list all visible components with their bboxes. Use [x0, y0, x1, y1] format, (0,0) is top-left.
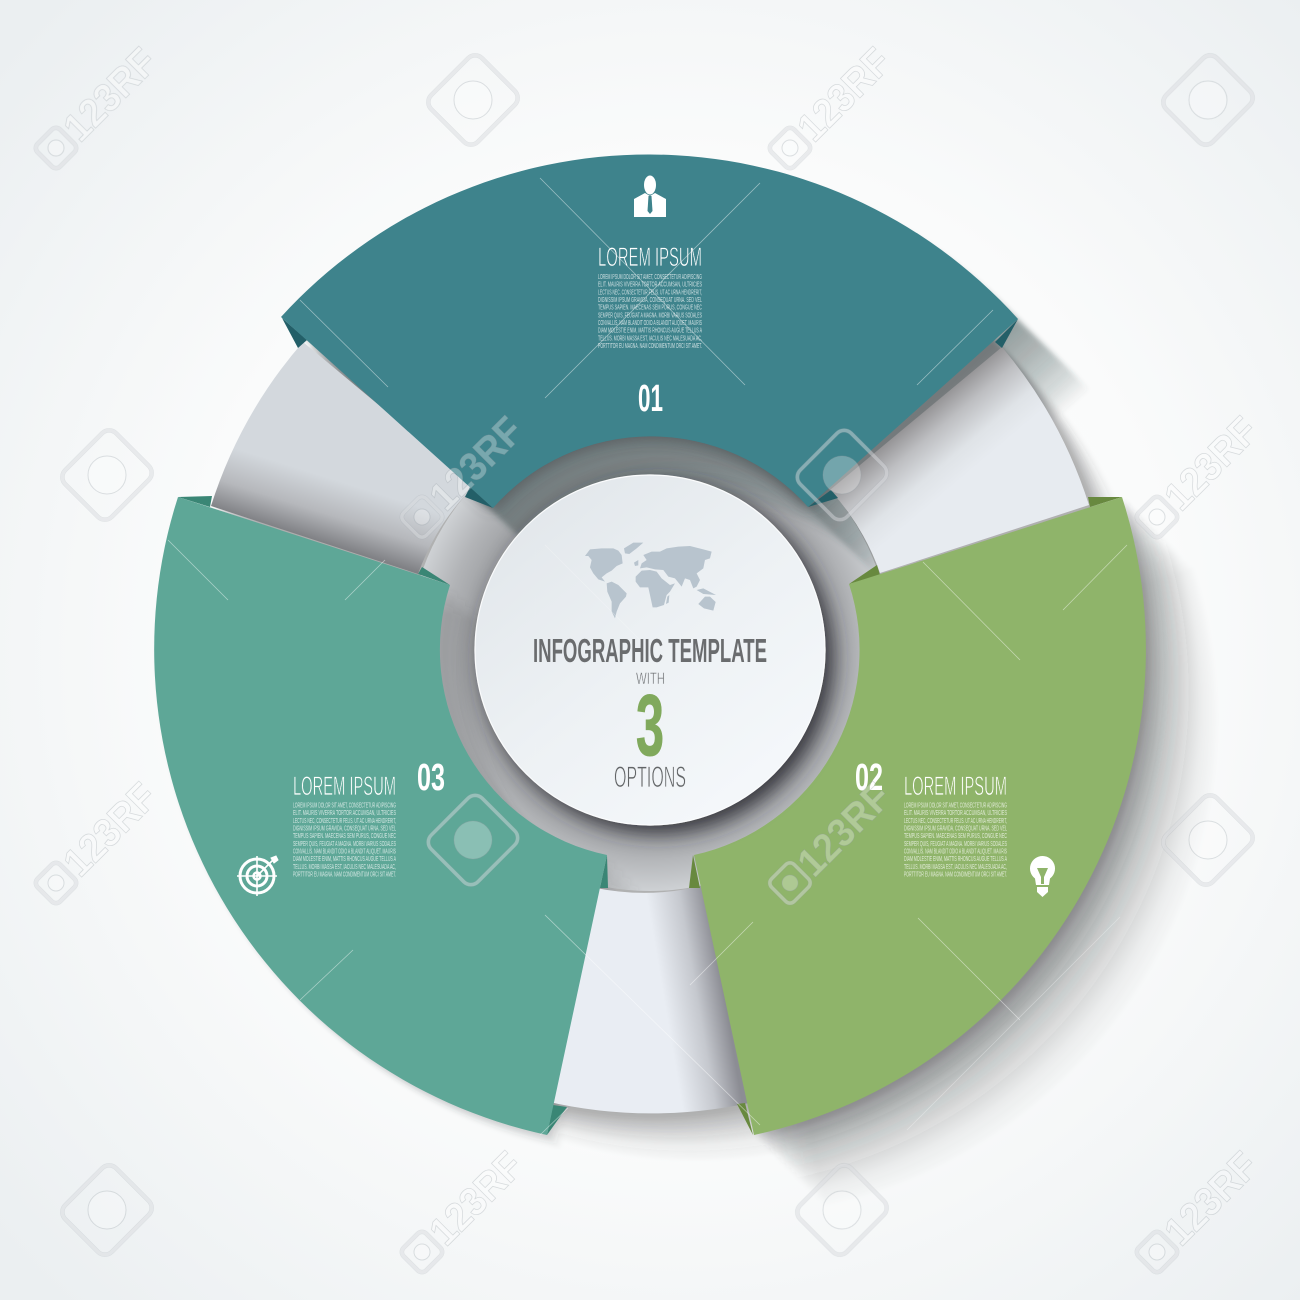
text: CONVALLIS. NAM BLANDIT ODIO A BLANDIT ALIQUET. MAURIS — [598, 320, 702, 327]
segment 01 body text: TELLUS. MORBI MASSA EST, IACULIS NEC MALESUADA AC, — [598, 335, 702, 342]
watermark: 123RF logos: 123RF — [55, 775, 166, 885]
watermark: diagonal cross lines — [168, 178, 1127, 1135]
segment 01 body text: ELIT. MAURIS VIVERRA TORTOR ACCUMSAN, ULTRICIES — [598, 282, 702, 289]
segment 01 number: 01 — [638, 378, 663, 420]
folds: teal segment — [282, 318, 1018, 508]
segment 02 body text: DIAM MOLESTIE ENIM, MATTIS RHONCUS AUGUE TELLUS A — [904, 856, 1007, 863]
icon: world map — [585, 543, 716, 618]
segment 03 body text: DIGNISSIM IPSUM GRAVIDA, CONSEQUAT URNA. SED VEL — [293, 826, 396, 832]
icon: person — [634, 176, 666, 217]
watermark: faint line on shadow — [907, 917, 1120, 1130]
segment 03 body text: ELIT. MAURIS VIVERRA TORTOR ACCUMSAN, ULTRICIES — [293, 810, 396, 817]
segment 03 body text — [293, 802, 396, 878]
segment 01 body text: SEMPER QUIS, FEUGIAT A MAGNA. MORBI VARIUS SODALES — [598, 312, 702, 319]
text: LECTUS NEC, CONSECTETUR FELIS. UT AC URNA HENDRERIT, — [904, 818, 1007, 825]
segment 02 body text — [904, 802, 1007, 878]
ring piece: upper right — [830, 347, 1089, 573]
segment 03 body text: TELLUS. MORBI MASSA EST, IACULIS NEC MALESUADA AC, — [293, 864, 396, 871]
watermark: 123RF logos: 123RF — [789, 40, 900, 150]
text: CONVALLIS. NAM BLANDIT ODIO A BLANDIT ALIQUET. MAURIS — [904, 848, 1007, 856]
folds: green segment — [689, 497, 1122, 1135]
segment 02 number: 02 — [855, 757, 883, 799]
segment 02 body text: ELIT. MAURIS VIVERRA TORTOR ACCUMSAN, ULTRICIES — [904, 810, 1007, 817]
watermark: 123RF logos: 123RF — [421, 1144, 532, 1254]
text: LOREM IPSUM DOLOR SIT AMET, CONSECTETUR ADIPISCING — [293, 802, 396, 810]
watermark: 123RF logos: 123RF — [789, 775, 900, 885]
segment 02 body text: TELLUS. MORBI MASSA EST, IACULIS NEC MALESUADA AC, — [904, 864, 1007, 871]
panel: segment 03 — [154, 497, 607, 1135]
segment 01 heading: LOREM IPSUM — [598, 242, 702, 272]
center disc — [475, 475, 825, 825]
icon: target with arrow — [237, 856, 278, 896]
ring piece: bottom — [545, 883, 762, 1113]
ring piece: left — [211, 342, 475, 574]
segment 01 body text: DIAM MOLESTIE ENIM, MATTIS RHONCUS AUGUE TELLUS A — [598, 328, 702, 335]
text: LECTUS NEC, CONSECTETUR FELIS. UT AC URNA HENDRERIT, — [293, 818, 396, 825]
segment 02 body text: TEMPUS SAPIEN. MAECENAS SEM PURUS, CONGUE NEC — [904, 833, 1007, 840]
watermark: 123RF logos: 123RF — [421, 409, 532, 519]
segment 01 body text — [598, 274, 702, 350]
watermark: 123RF logos: 123RF — [1156, 1144, 1267, 1254]
panel: segment 02 — [694, 497, 1146, 1135]
icon: light bulb — [1030, 856, 1055, 897]
text: PORTTITOR EU MAGNA. NAM CONDIMENTUM ORCI SIT AMET. — [904, 872, 1007, 878]
segment 02 heading: LOREM IPSUM — [904, 771, 1007, 801]
text: LOREM IPSUM DOLOR SIT AMET, CONSECTETUR ADIPISCING — [904, 802, 1007, 810]
segment 01 body text: LOREM IPSUM DOLOR SIT AMET, CONSECTETUR ADIPISCING — [598, 274, 702, 281]
panel: segment 01 — [281, 154, 1018, 508]
watermark: 123RF logos: 123RF — [1156, 409, 1267, 519]
center label: with: WITH — [636, 670, 665, 688]
center label: options: OPTIONS — [614, 761, 686, 794]
text: PORTTITOR EU MAGNA. NAM CONDIMENTUM ORCI SIT AMET. — [293, 872, 396, 878]
segment 02 body text: DIGNISSIM IPSUM GRAVIDA, CONSEQUAT URNA. SED VEL — [904, 826, 1007, 832]
segment 01 body text: TEMPUS SAPIEN. MAECENAS SEM PURUS, CONGUE NEC — [598, 305, 702, 312]
center number 3: 3 — [636, 678, 664, 774]
segment 03 heading: LOREM IPSUM — [293, 771, 396, 801]
text: LECTUS NEC, CONSECTETUR FELIS. UT AC URNA HENDRERIT, — [598, 289, 702, 296]
watermark: 123RF logos: 123RF — [55, 40, 166, 150]
segment 01 body text: DIGNISSIM IPSUM GRAVIDA, CONSEQUAT URNA. SED VEL — [598, 297, 702, 304]
segment shadows on hub ring — [440, 436, 876, 890]
long drop shadows on background — [157, 159, 1216, 1205]
segment 03 body text: TEMPUS SAPIEN. MAECENAS SEM PURUS, CONGUE NEC — [293, 833, 396, 840]
text: PORTTITOR EU MAGNA. NAM CONDIMENTUM ORCI SIT AMET. — [598, 343, 702, 350]
segment 03 body text: DIAM MOLESTIE ENIM, MATTIS RHONCUS AUGUE TELLUS A — [293, 856, 396, 863]
segment 03 body text: SEMPER QUIS, FEUGIAT A MAGNA. MORBI VARIUS SODALES — [293, 841, 396, 848]
text: CONVALLIS. NAM BLANDIT ODIO A BLANDIT ALIQUET. MAURIS — [293, 848, 396, 856]
segment 02 body text: SEMPER QUIS, FEUGIAT A MAGNA. MORBI VARIUS SODALES — [904, 841, 1007, 848]
center title: INFOGRAPHIC TEMPLATE — [533, 632, 767, 669]
inner hub ring — [409, 409, 891, 891]
segment 03 number: 03 — [417, 757, 445, 799]
folds: sea green segment — [178, 496, 608, 1135]
